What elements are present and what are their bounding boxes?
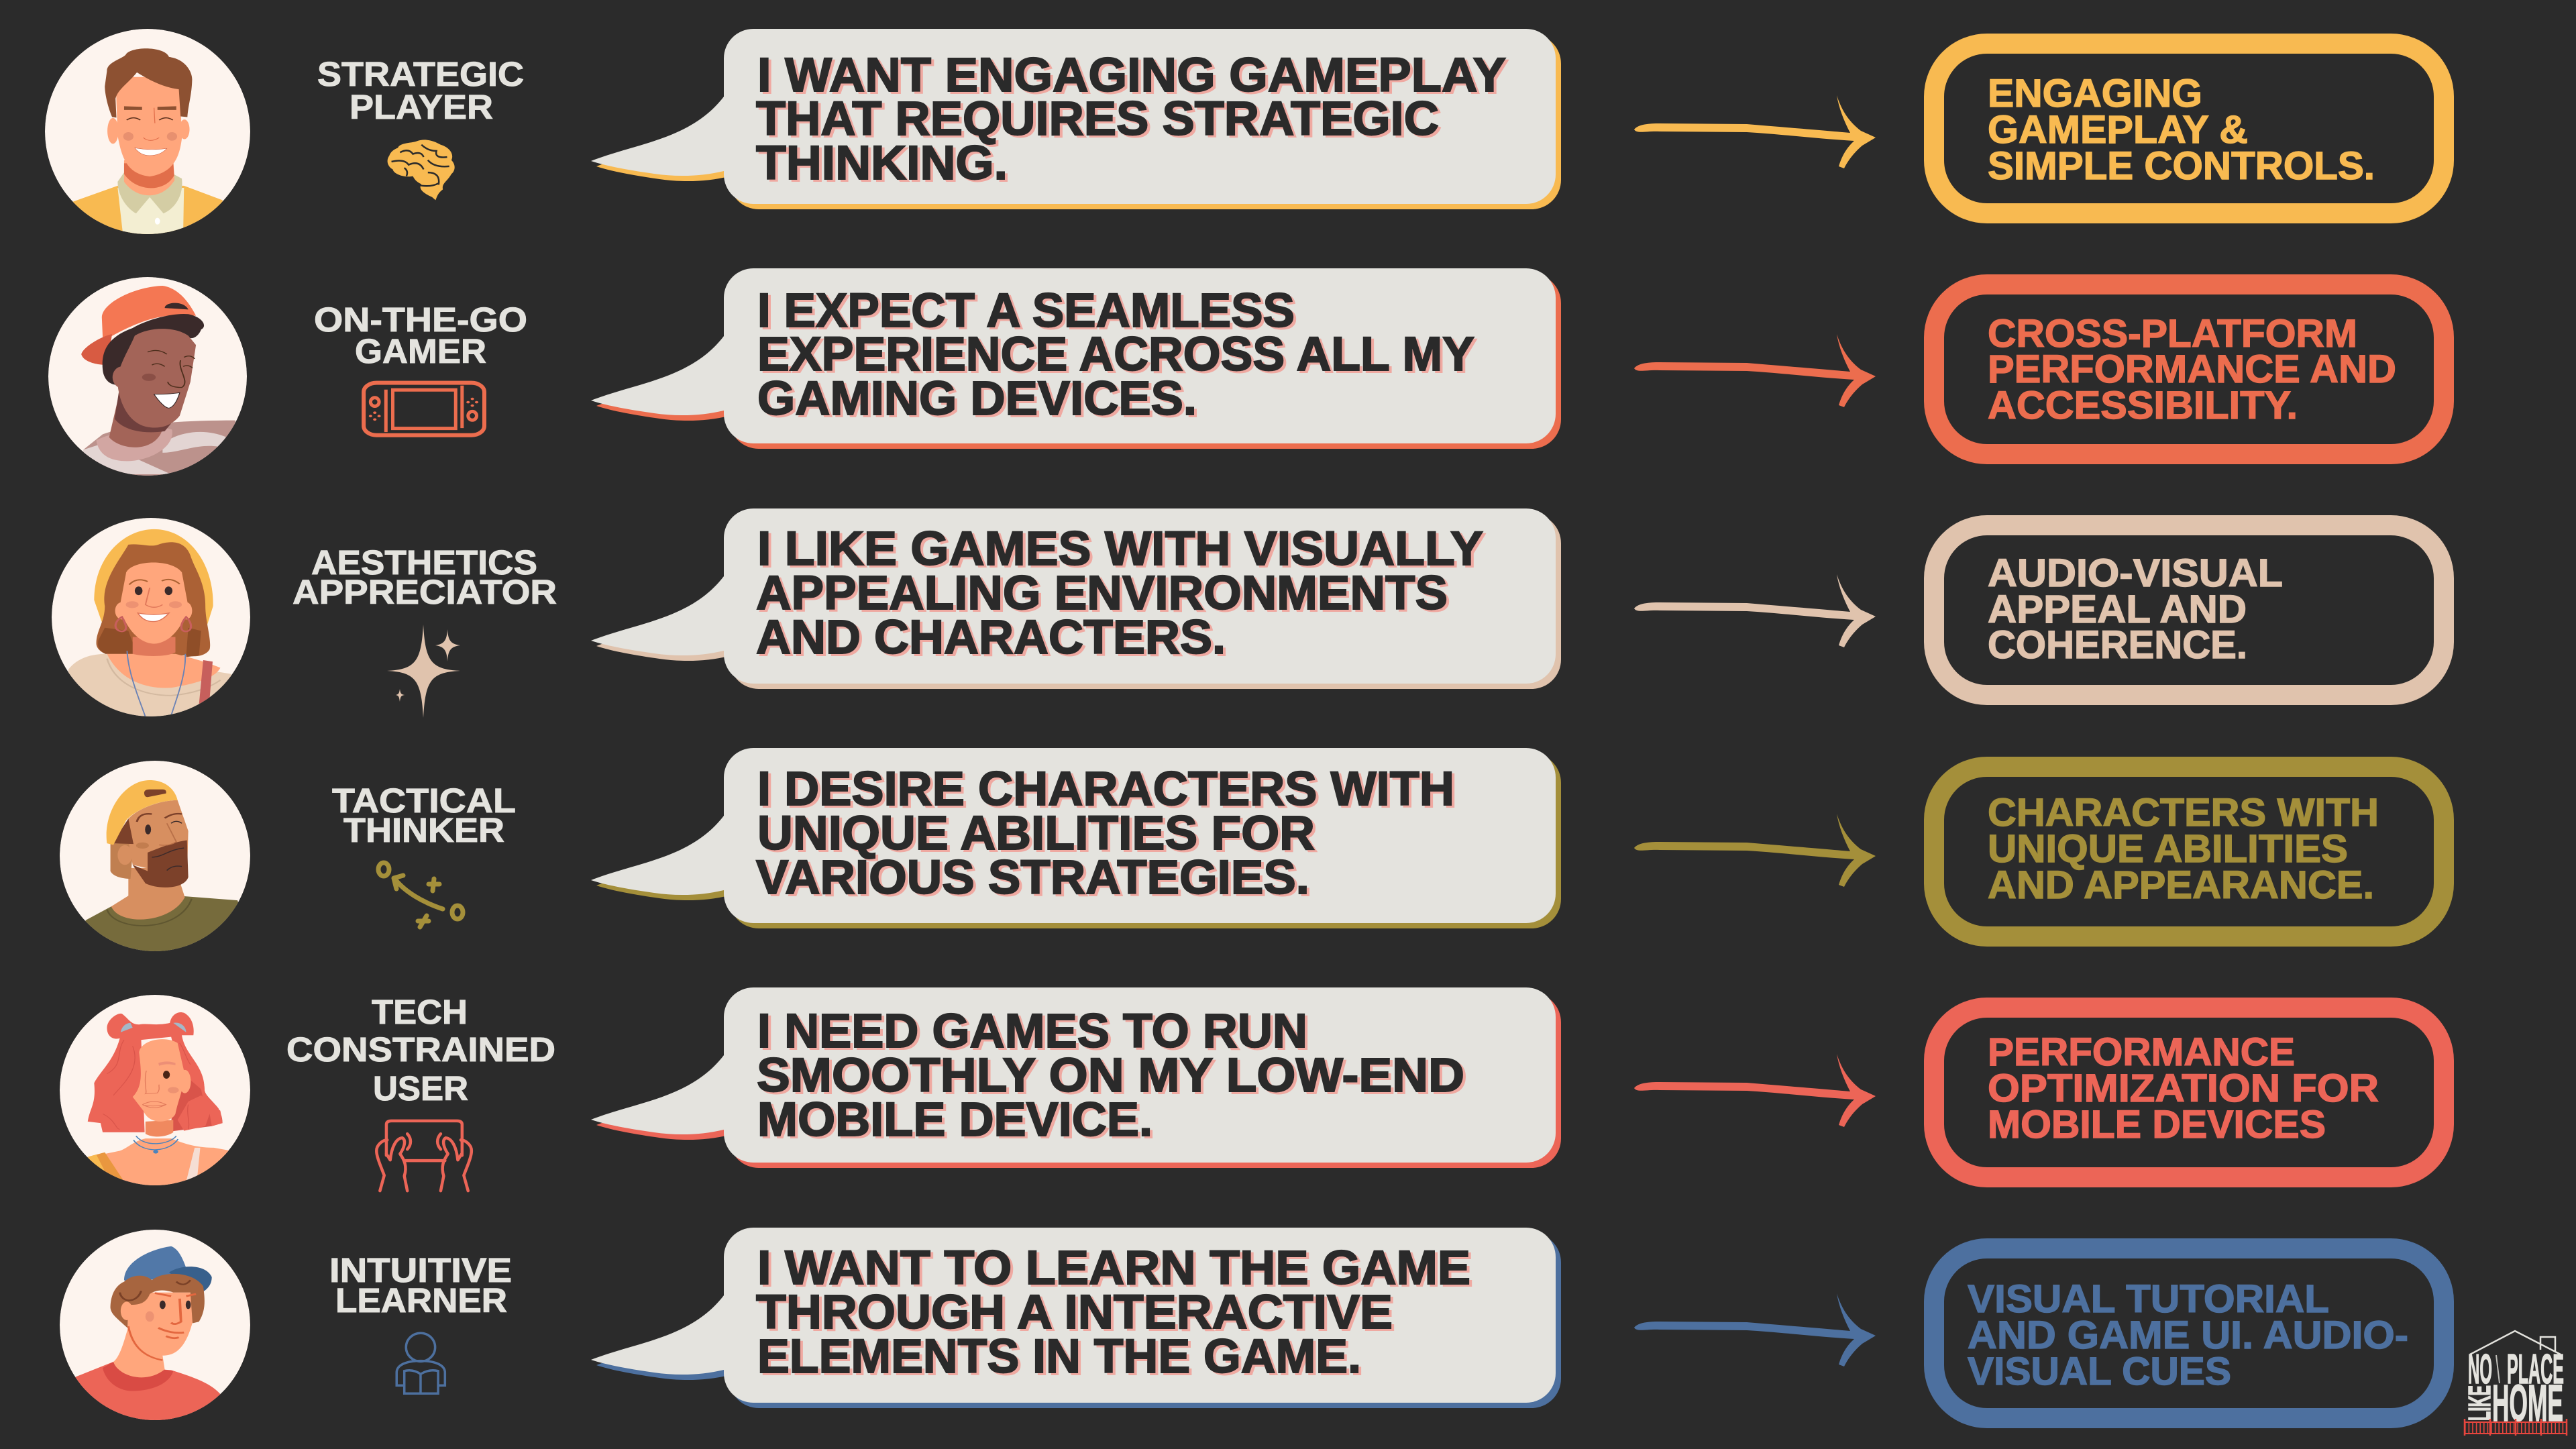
icon: sparkles	[387, 625, 460, 718]
quote: row 1: THINKING.	[756, 137, 1008, 190]
quote: row 1: THAT REQUIRES STRATEGIC	[756, 93, 1439, 146]
quote: row 3: AND CHARACTERS.	[756, 611, 1226, 664]
quote: row 2: I EXPECT A SEAMLESS	[757, 284, 1295, 337]
need pill: row 3: COHERENCE.	[1988, 623, 2247, 667]
portrait: on-the-go gamer	[48, 277, 247, 480]
logo: no place like home: NO	[2468, 1346, 2492, 1393]
quote: row 4: UNIQUE ABILITIES FOR	[757, 807, 1315, 860]
quote: row 4: VARIOUS STRATEGIES.	[756, 851, 1309, 904]
label: tech constrained user: TECH	[372, 993, 468, 1031]
logo: no place like home: LIKE	[2462, 1385, 2497, 1421]
quote: row 2: EXPERIENCE ACROSS ALL MY	[757, 328, 1474, 381]
need pill: row 3	[1934, 525, 2444, 695]
label: tech constrained user	[286, 993, 555, 1108]
speech bubble: row 3	[591, 508, 1561, 689]
need pill: row 2	[1934, 284, 2444, 454]
need pill: row 6: VISUAL CUES	[1968, 1350, 2231, 1393]
portrait: tactical thinker	[60, 761, 257, 954]
quote: row 4: I DESIRE CHARACTERS WITH	[757, 763, 1454, 816]
arrow: row 3	[1634, 574, 1876, 647]
need pill: row 6	[1934, 1248, 2444, 1418]
label: aesthetics appreciator: APPRECIATOR	[292, 573, 557, 611]
quote: row 2	[757, 284, 1474, 425]
speech bubble: row 6	[591, 1228, 1561, 1408]
label: tactical thinker: THINKER	[343, 811, 504, 849]
portrait: strategic player	[45, 29, 250, 246]
quote: row 6: I WANT TO LEARN THE GAME	[757, 1242, 1470, 1295]
label: aesthetics appreciator: AESTHETICS	[311, 543, 537, 582]
need pill: row 1	[1934, 44, 2444, 213]
label: on-the-go gamer: GAMER	[355, 332, 486, 370]
quote: row 4	[756, 763, 1454, 904]
label: intuitive learner: INTUITIVE	[329, 1251, 512, 1289]
need pill: row 5: OPTIMIZATION FOR	[1988, 1067, 2379, 1110]
need pill: row 4: AND APPEARANCE.	[1988, 863, 2374, 907]
need pill: row 5: MOBILE DEVICES	[1988, 1103, 2326, 1146]
label: strategic player: STRATEGIC	[317, 55, 524, 93]
arrow: row 2	[1634, 334, 1876, 407]
portrait: aesthetics appreciator	[52, 518, 250, 729]
arrow: row 1	[1634, 95, 1876, 168]
icon: tactics play diagram	[378, 863, 463, 927]
label: strategic player	[317, 55, 524, 126]
label: on-the-go gamer: ON-THE-GO	[314, 301, 527, 339]
icon: hands holding tablet	[376, 1121, 472, 1191]
label: aesthetics appreciator	[292, 543, 557, 611]
need pill: row 6: VISUAL TUTORIAL	[1968, 1277, 2329, 1321]
need pill: row 1: GAMEPLAY &	[1988, 108, 2248, 152]
need pill: row 2: PERFORMANCE AND	[1988, 347, 2396, 391]
quote: row 5: I NEED GAMES TO RUN	[757, 1005, 1307, 1058]
quote: row 6: ELEMENTS IN THE GAME.	[757, 1330, 1361, 1383]
icon: brain	[388, 140, 455, 200]
label: on-the-go gamer	[314, 301, 527, 370]
logo: no place like home	[2462, 1331, 2567, 1436]
need pill: row 5	[1934, 1008, 2444, 1177]
icon: handheld console	[364, 383, 484, 435]
quote: row 1	[756, 49, 1506, 190]
speech bubble: row 4	[591, 748, 1561, 928]
quote: row 6	[756, 1242, 1470, 1383]
label: intuitive learner: LEARNER	[335, 1281, 507, 1320]
portrait: intuitive learner	[60, 1230, 250, 1421]
need pill: row 1: SIMPLE CONTROLS.	[1988, 144, 2375, 188]
need pill: row 5: PERFORMANCE	[1988, 1030, 2295, 1074]
label: tactical thinker: TACTICAL	[332, 782, 516, 820]
need pill: row 2: ACCESSIBILITY.	[1988, 384, 2298, 427]
quote: row 3: APPEALING ENVIRONMENTS	[756, 567, 1448, 620]
quote: row 6: THROUGH A INTERACTIVE	[756, 1286, 1393, 1339]
quote: row 3	[756, 523, 1483, 664]
need pill: row 6: AND GAME UI. AUDIO-	[1968, 1313, 2408, 1357]
label: tactical thinker	[332, 782, 516, 849]
need pill: row 4: CHARACTERS WITH	[1988, 791, 2379, 835]
quote: row 5: SMOOTHLY ON MY LOW-END	[757, 1049, 1464, 1102]
label: tech constrained user: CONSTRAINED	[286, 1030, 555, 1069]
quote: row 1: I WANT ENGAGING GAMEPLAY	[757, 49, 1506, 102]
quote: row 5	[757, 1005, 1464, 1146]
need pill: row 2: CROSS-PLATFORM	[1988, 312, 2357, 356]
speech bubble: row 1	[591, 29, 1561, 209]
quote: row 5: MOBILE DEVICE.	[757, 1093, 1152, 1146]
portrait: tech constrained user	[60, 995, 250, 1188]
arrow: row 6	[1634, 1293, 1876, 1366]
arrow: row 5	[1634, 1054, 1876, 1127]
label: strategic player: PLAYER	[350, 88, 493, 126]
need pill: row 4	[1934, 767, 2444, 936]
label: intuitive learner	[329, 1251, 512, 1320]
need pill: row 3: APPEAL AND	[1988, 588, 2247, 631]
need pill: row 4: UNIQUE ABILITIES	[1988, 827, 2348, 871]
arrow: row 4	[1634, 814, 1876, 887]
need pill: row 1: ENGAGING	[1988, 72, 2202, 115]
quote: row 2: GAMING DEVICES.	[757, 372, 1197, 425]
need pill: row 3: AUDIO-VISUAL	[1988, 551, 2283, 595]
label: tech constrained user: USER	[373, 1069, 468, 1108]
icon: person reading	[396, 1333, 445, 1393]
speech bubble: row 2	[591, 268, 1561, 449]
quote: row 3: I LIKE GAMES WITH VISUALLY	[757, 523, 1483, 576]
speech bubble: row 5	[591, 987, 1561, 1168]
